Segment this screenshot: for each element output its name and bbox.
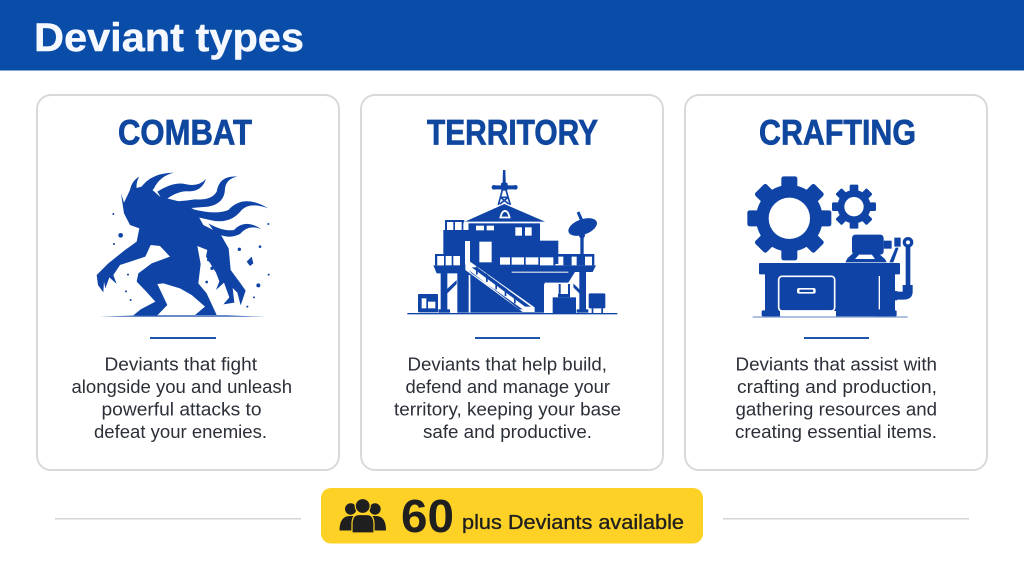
- text: territory description: [394, 355, 621, 442]
- text: territory description: Deviants that help build,: [408, 355, 607, 375]
- text: combat description: defeat your enemies.: [94, 422, 267, 442]
- number: 60: [401, 490, 454, 542]
- panel: combat: [37, 95, 339, 470]
- lever and pipe: [889, 237, 913, 300]
- heading: territory: TERRITORY: [427, 114, 598, 152]
- large gear: [747, 176, 831, 260]
- text: combat description: powerful attacks to: [102, 400, 262, 420]
- text: crafting description: gathering resources and: [736, 400, 937, 420]
- footer rule left: [55, 518, 301, 520]
- satellite dish: [566, 211, 599, 256]
- roof and main building: [465, 204, 545, 222]
- crates: [418, 294, 438, 312]
- antenna: [492, 170, 518, 205]
- text: territory description: territory, keeping your base: [394, 400, 621, 420]
- divider: [150, 337, 216, 339]
- text: crafting description: crafting and production,: [737, 377, 937, 397]
- motor: [845, 235, 892, 262]
- header band: [0, 0, 1024, 70]
- label: plus Deviants available: [462, 512, 684, 534]
- ground: [407, 313, 617, 314]
- bench: [753, 263, 908, 317]
- text: crafting description: creating essential items.: [735, 422, 937, 442]
- staircase: [465, 262, 535, 312]
- text: combat description: Deviants that fight: [104, 355, 257, 375]
- text: combat description: alongside you and unleash: [72, 377, 292, 397]
- divider: [804, 337, 869, 339]
- text: combat description: [72, 355, 292, 442]
- icon: group of people: [340, 498, 386, 533]
- heading: crafting: CRAFTING: [759, 114, 916, 152]
- icon: gears and workbench: [747, 176, 913, 317]
- deck: [433, 265, 596, 283]
- text: crafting description: [735, 355, 937, 442]
- text: crafting description: Deviants that assist with: [736, 355, 937, 375]
- text: territory description: defend and manage your: [406, 377, 610, 397]
- panel: crafting: [685, 95, 987, 470]
- callout: deviant count: [321, 488, 703, 544]
- divider: [475, 337, 540, 339]
- panel: territory: [361, 95, 663, 470]
- icon: base building: [407, 170, 617, 314]
- small gear: [832, 185, 876, 229]
- text: territory description: safe and productive.: [423, 422, 592, 442]
- footer rule right: [723, 518, 969, 520]
- heading: combat: COMBAT: [118, 114, 252, 152]
- icon: deviant creature silhouette: [97, 173, 270, 317]
- title: Deviant types: [34, 16, 304, 60]
